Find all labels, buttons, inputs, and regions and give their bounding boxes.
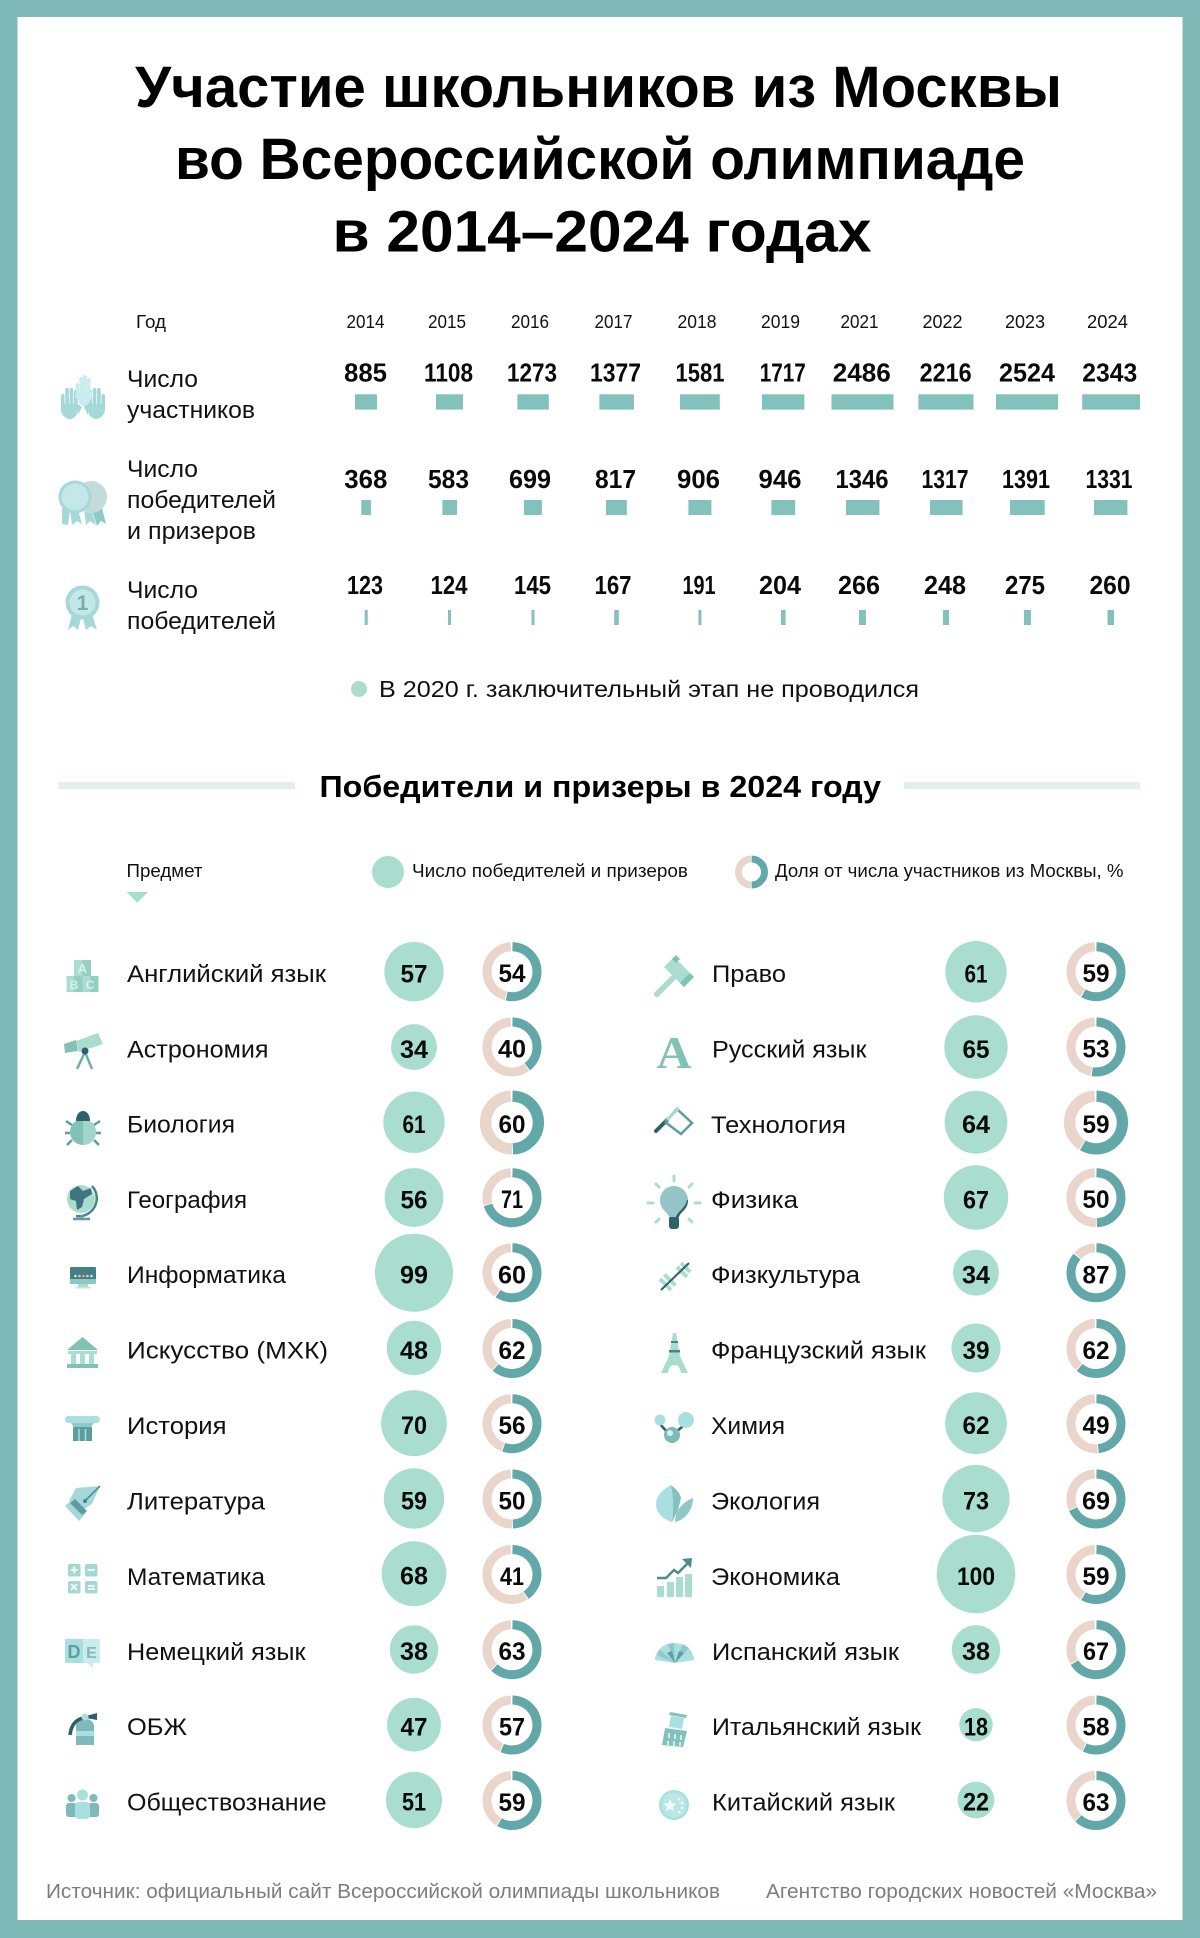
label: Число — [127, 456, 198, 483]
year header row: 2014 — [346, 312, 384, 332]
subject name: Экономика — [711, 1564, 841, 1591]
donut share — [1071, 1173, 1121, 1223]
donut share: 54 — [498, 960, 526, 988]
subject name: Английский язык — [127, 961, 327, 988]
subject: Биология — [65, 1092, 538, 1153]
label — [127, 577, 276, 635]
subject: Право — [654, 941, 1121, 1002]
label: и призеров — [127, 518, 256, 545]
subject: Испанский язык — [655, 1625, 1121, 1675]
icon: gavel — [654, 955, 694, 997]
donut share: 63 — [498, 1638, 526, 1666]
section heading: Победители и призеры в 2024 году — [320, 769, 882, 804]
icon: light bulb — [648, 1176, 700, 1229]
bubble value: 34 — [400, 1036, 428, 1064]
donut share: 62 — [498, 1337, 526, 1365]
icon: museum — [67, 1337, 98, 1368]
icon: telescope — [64, 1033, 103, 1069]
donut share: 60 — [498, 1261, 526, 1289]
title: во Всероссийской олимпиаде — [175, 127, 1025, 192]
icon: leaning tower — [662, 1712, 687, 1747]
icon: math signs — [68, 1564, 98, 1594]
icon: growth chart — [657, 1558, 692, 1597]
bubble value: 73 — [963, 1487, 989, 1515]
values and bars: 1273 — [507, 358, 557, 388]
bubble value — [384, 1468, 444, 1529]
donut share — [1071, 947, 1121, 997]
values and bars: 885 — [344, 358, 387, 388]
subject name: Математика — [127, 1564, 266, 1591]
bubble value — [383, 1092, 445, 1153]
subject: История — [65, 1390, 537, 1456]
bubble value: 65 — [962, 1036, 990, 1064]
subject: Технология — [656, 1091, 1122, 1154]
donut share: 58 — [1082, 1714, 1110, 1742]
values and bars: 2343 — [1082, 358, 1137, 388]
subject name: Информатика — [127, 1262, 287, 1289]
row: participants — [61, 358, 1140, 424]
bubble value — [944, 1165, 1008, 1230]
subject name: География — [127, 1187, 247, 1214]
icon: group of people — [66, 1790, 99, 1819]
donut share — [487, 1474, 537, 1524]
icon: dumbbell — [660, 1263, 690, 1290]
subject name: Русский язык — [712, 1036, 867, 1064]
subject name: Физкультура — [711, 1262, 861, 1289]
bubble value — [382, 1541, 446, 1606]
values and bars: 2524 — [999, 358, 1056, 388]
values and bars: 583 — [428, 464, 469, 494]
icon: globe — [67, 1185, 97, 1219]
donut share: 56 — [498, 1412, 526, 1440]
donut share — [1070, 1096, 1122, 1149]
values and bars: 1391 — [1002, 464, 1050, 494]
subject name: Астрономия — [127, 1036, 268, 1064]
bubble value — [386, 1772, 442, 1828]
subject: Английский язык — [66, 942, 537, 1001]
donut share — [487, 1776, 537, 1826]
donut share: 40 — [498, 1036, 526, 1064]
donut share: 53 — [1082, 1036, 1110, 1064]
values and bars: 275 — [1005, 570, 1045, 600]
donut share — [1071, 1776, 1121, 1826]
title: в 2014–2024 годах — [332, 200, 872, 264]
bubble value — [385, 1168, 443, 1227]
year header row: 2019 — [761, 312, 800, 332]
subject: Китайский язык — [659, 1776, 1121, 1826]
subject: Обществознание — [66, 1772, 537, 1828]
section heading — [58, 769, 1140, 804]
values and bars: 2216 — [920, 358, 972, 388]
values and bars: 123 — [347, 570, 383, 600]
values and bars: 906 — [677, 464, 720, 494]
donut share — [487, 1700, 537, 1750]
values and bars: 1317 — [922, 464, 968, 494]
donut share: 50 — [1082, 1186, 1110, 1214]
values and bars: 699 — [509, 464, 551, 494]
icon: two medals — [58, 480, 107, 526]
donut share — [487, 1625, 537, 1675]
icon: molecule — [654, 1412, 694, 1443]
subject name: Немецкий язык — [127, 1639, 306, 1666]
bubble value: 56 — [400, 1186, 428, 1214]
icon: medal number one: 1 — [77, 592, 89, 615]
title — [135, 55, 1062, 264]
bubble value: 61 — [964, 960, 988, 988]
donut share: 50 — [498, 1488, 526, 1516]
donut share — [1071, 1550, 1121, 1600]
bubble value: 62 — [962, 1412, 990, 1440]
bubble value: 68 — [400, 1562, 428, 1590]
legend: Число победителей и призеров — [412, 860, 688, 881]
year header row: 2022 — [922, 312, 962, 332]
icon: monitor — [70, 1267, 96, 1288]
donut share — [1071, 1625, 1121, 1675]
label — [127, 366, 255, 424]
donut share: 63 — [1082, 1789, 1110, 1817]
subject name: Физика — [711, 1187, 799, 1214]
year header row: 2016 — [511, 312, 549, 332]
donut share — [1071, 1248, 1121, 1298]
donut share: 67 — [1083, 1638, 1109, 1666]
subject: Французский язык — [661, 1324, 1121, 1374]
bubble value — [944, 1015, 1008, 1079]
values and bars: 817 — [595, 464, 636, 494]
values and bars: 204 — [759, 570, 802, 600]
label: победителей — [127, 608, 276, 635]
bubble value — [959, 1708, 993, 1741]
bubble value — [945, 1392, 1007, 1454]
values and bars: 260 — [1090, 570, 1130, 600]
icon: fan — [655, 1643, 694, 1663]
subject name: История — [127, 1413, 226, 1440]
subject: Математика — [68, 1541, 537, 1606]
note: 2020: В 2020 г. заключительный этап не проводился — [379, 676, 919, 702]
footer agency: Агентство городских новостей «Москва» — [766, 1881, 1157, 1903]
row: winners — [66, 570, 1130, 635]
icon: alphabet blocks: C — [86, 978, 95, 992]
donut share: 59 — [498, 1789, 526, 1817]
subject: Экономика — [657, 1535, 1121, 1613]
year header row: 2018 — [678, 312, 716, 332]
bubble value — [952, 1625, 1000, 1674]
donut share — [1071, 1022, 1121, 1072]
subject: Химия — [654, 1392, 1121, 1454]
year header row: 2023 — [1005, 312, 1045, 332]
donut share — [487, 1399, 537, 1449]
icon: leaves — [656, 1485, 693, 1522]
bubble value: 38 — [400, 1638, 428, 1666]
label: Число — [127, 366, 198, 393]
subject name: Литература — [127, 1488, 266, 1516]
values and bars: 167 — [594, 570, 632, 600]
icon: alphabet blocks: B — [70, 978, 79, 992]
subject: Итальянский язык — [662, 1700, 1121, 1750]
legend: Доля от числа участников из Москвы, % — [775, 860, 1124, 881]
year header row — [136, 312, 1128, 332]
donut share: 41 — [500, 1563, 524, 1591]
values and bars: 1331 — [1086, 464, 1132, 494]
subject name: Химия — [711, 1413, 785, 1440]
subject name: ОБЖ — [127, 1714, 187, 1741]
bubble value: 67 — [963, 1186, 989, 1214]
donut share: 59 — [1082, 960, 1110, 988]
subject name: Экология — [711, 1488, 820, 1516]
donut share: 87 — [1082, 1261, 1110, 1289]
bubble value: 47 — [400, 1713, 428, 1741]
values and bars: 266 — [838, 570, 880, 600]
subject: Немецкий язык — [65, 1625, 537, 1675]
subject name: Китайский язык — [712, 1790, 896, 1816]
subject name: Технология — [711, 1112, 846, 1139]
values and bars: 1581 — [676, 358, 724, 388]
bubble value: 100 — [957, 1563, 995, 1591]
donut share — [487, 1324, 537, 1374]
legend — [126, 856, 1124, 903]
donut share: 59 — [1082, 1563, 1110, 1591]
bubble value: 22 — [963, 1788, 989, 1816]
icon: beetle — [65, 1111, 101, 1145]
icon: china coin — [659, 1790, 689, 1820]
bubble value: 48 — [400, 1337, 428, 1365]
title: Участие школьников из Москвы — [135, 55, 1062, 120]
icon: DE speech bubble: D — [68, 1642, 80, 1662]
donut share — [487, 1022, 537, 1072]
icon: DE speech bubble: E — [86, 1645, 97, 1662]
subject: Русский язык — [656, 1015, 1121, 1079]
donut share — [1071, 1474, 1121, 1524]
bubble value: 39 — [962, 1337, 990, 1365]
bubble value: 18 — [964, 1713, 988, 1741]
values and bars: 1346 — [836, 464, 888, 494]
label — [127, 456, 276, 545]
values and bars: 145 — [514, 570, 551, 600]
donut share: 69 — [1082, 1488, 1110, 1516]
donut share: 71 — [501, 1186, 523, 1214]
panel: subjects left column — [64, 942, 538, 1828]
bubble value: 64 — [962, 1111, 990, 1139]
label: участников — [127, 397, 255, 424]
subject: География — [67, 1168, 537, 1227]
bubble value: 61 — [402, 1111, 426, 1139]
bubble value: 57 — [400, 960, 428, 988]
row: winners and prize-winners — [58, 456, 1132, 545]
legend: Предмет — [126, 860, 203, 881]
values and bars: 1108 — [424, 358, 473, 388]
subject: Литература — [65, 1468, 537, 1529]
bubble value — [387, 1698, 441, 1752]
bubble value — [952, 1324, 1000, 1372]
year header row: 2015 — [428, 312, 466, 332]
donut share — [1071, 1700, 1121, 1750]
donut share — [487, 1248, 537, 1298]
year header row: 2021 — [840, 312, 878, 332]
subject: Информатика — [70, 1234, 537, 1312]
bubble value — [937, 1535, 1015, 1613]
icon: fountain pen nib — [65, 1486, 100, 1521]
bubble value — [390, 1625, 438, 1674]
donut share — [486, 1096, 538, 1149]
bubble value — [945, 1091, 1007, 1154]
bubble value — [375, 1234, 453, 1312]
icon: DE speech bubble — [65, 1639, 100, 1668]
icon: column — [65, 1416, 100, 1441]
values and bars — [347, 570, 1130, 625]
donut share — [487, 947, 537, 997]
donut share: 59 — [1082, 1111, 1110, 1139]
year header row: 2017 — [594, 312, 632, 332]
bubble value — [958, 1782, 994, 1818]
bubble value — [384, 942, 444, 1001]
subject: Искусство (МХК) — [67, 1321, 537, 1375]
values and bars: 1717 — [760, 358, 806, 388]
year header row: Год — [136, 312, 167, 332]
icon: letter A: A — [656, 1027, 692, 1078]
subject: Экология — [656, 1465, 1121, 1532]
donut share: 57 — [499, 1714, 525, 1742]
subject name: Итальянский язык — [712, 1714, 922, 1741]
footer source: Источник: официальный сайт Всероссийской олимпиады школьников — [46, 1881, 720, 1903]
label: победителей — [127, 487, 276, 514]
subject name: Биология — [127, 1112, 235, 1138]
year header row: 2024 — [1087, 312, 1128, 332]
donut share — [487, 1550, 537, 1600]
bubble value — [953, 1250, 999, 1296]
values and bars: 124 — [430, 570, 468, 600]
bubble value: 38 — [962, 1638, 990, 1666]
bubble value — [945, 941, 1007, 1002]
subject name: Право — [712, 961, 786, 988]
subject name: Испанский язык — [712, 1639, 900, 1666]
donut share: 49 — [1082, 1412, 1110, 1440]
values and bars: 248 — [924, 570, 966, 600]
bubble value: 70 — [401, 1412, 427, 1440]
bubble value: 34 — [962, 1262, 990, 1290]
values and bars — [344, 358, 1140, 410]
icon: alphabet blocks — [66, 960, 98, 992]
panel: subjects right column — [648, 941, 1122, 1826]
values and bars: 1377 — [590, 358, 641, 388]
donut share — [1071, 1399, 1121, 1449]
label: Число — [127, 577, 198, 604]
bubble value — [387, 1321, 441, 1375]
bubble value: 59 — [401, 1487, 427, 1515]
bubble value — [381, 1390, 447, 1456]
icon: alphabet blocks: A — [78, 961, 88, 976]
values and bars: 946 — [758, 464, 802, 494]
donut share — [1071, 1324, 1121, 1374]
icon: hacksaw — [656, 1108, 692, 1134]
subject name: Обществознание — [127, 1790, 326, 1816]
icon: eiffel tower — [661, 1333, 688, 1373]
values and bars: 2486 — [833, 358, 891, 388]
subject: Физика — [648, 1165, 1121, 1230]
bubble value: 99 — [400, 1262, 428, 1290]
bubble value: 51 — [402, 1788, 426, 1816]
subject name: Французский язык — [711, 1338, 927, 1364]
icon: raised hands — [61, 375, 105, 419]
bubble value — [391, 1024, 437, 1070]
donut share: 60 — [498, 1111, 526, 1139]
subject name: Искусство (МХК) — [127, 1338, 328, 1364]
values and bars: 368 — [344, 464, 387, 494]
icon: fire extinguisher — [70, 1713, 97, 1745]
donut share: 62 — [1082, 1337, 1110, 1365]
values and bars: 191 — [682, 570, 716, 600]
values and bars — [344, 464, 1132, 515]
bubble value — [942, 1465, 1010, 1532]
subject: Физкультура — [660, 1248, 1121, 1298]
icon: medal number one — [66, 586, 100, 630]
donut share — [487, 1173, 537, 1223]
subject: Астрономия — [64, 1022, 537, 1072]
subject: ОБЖ — [70, 1698, 537, 1752]
